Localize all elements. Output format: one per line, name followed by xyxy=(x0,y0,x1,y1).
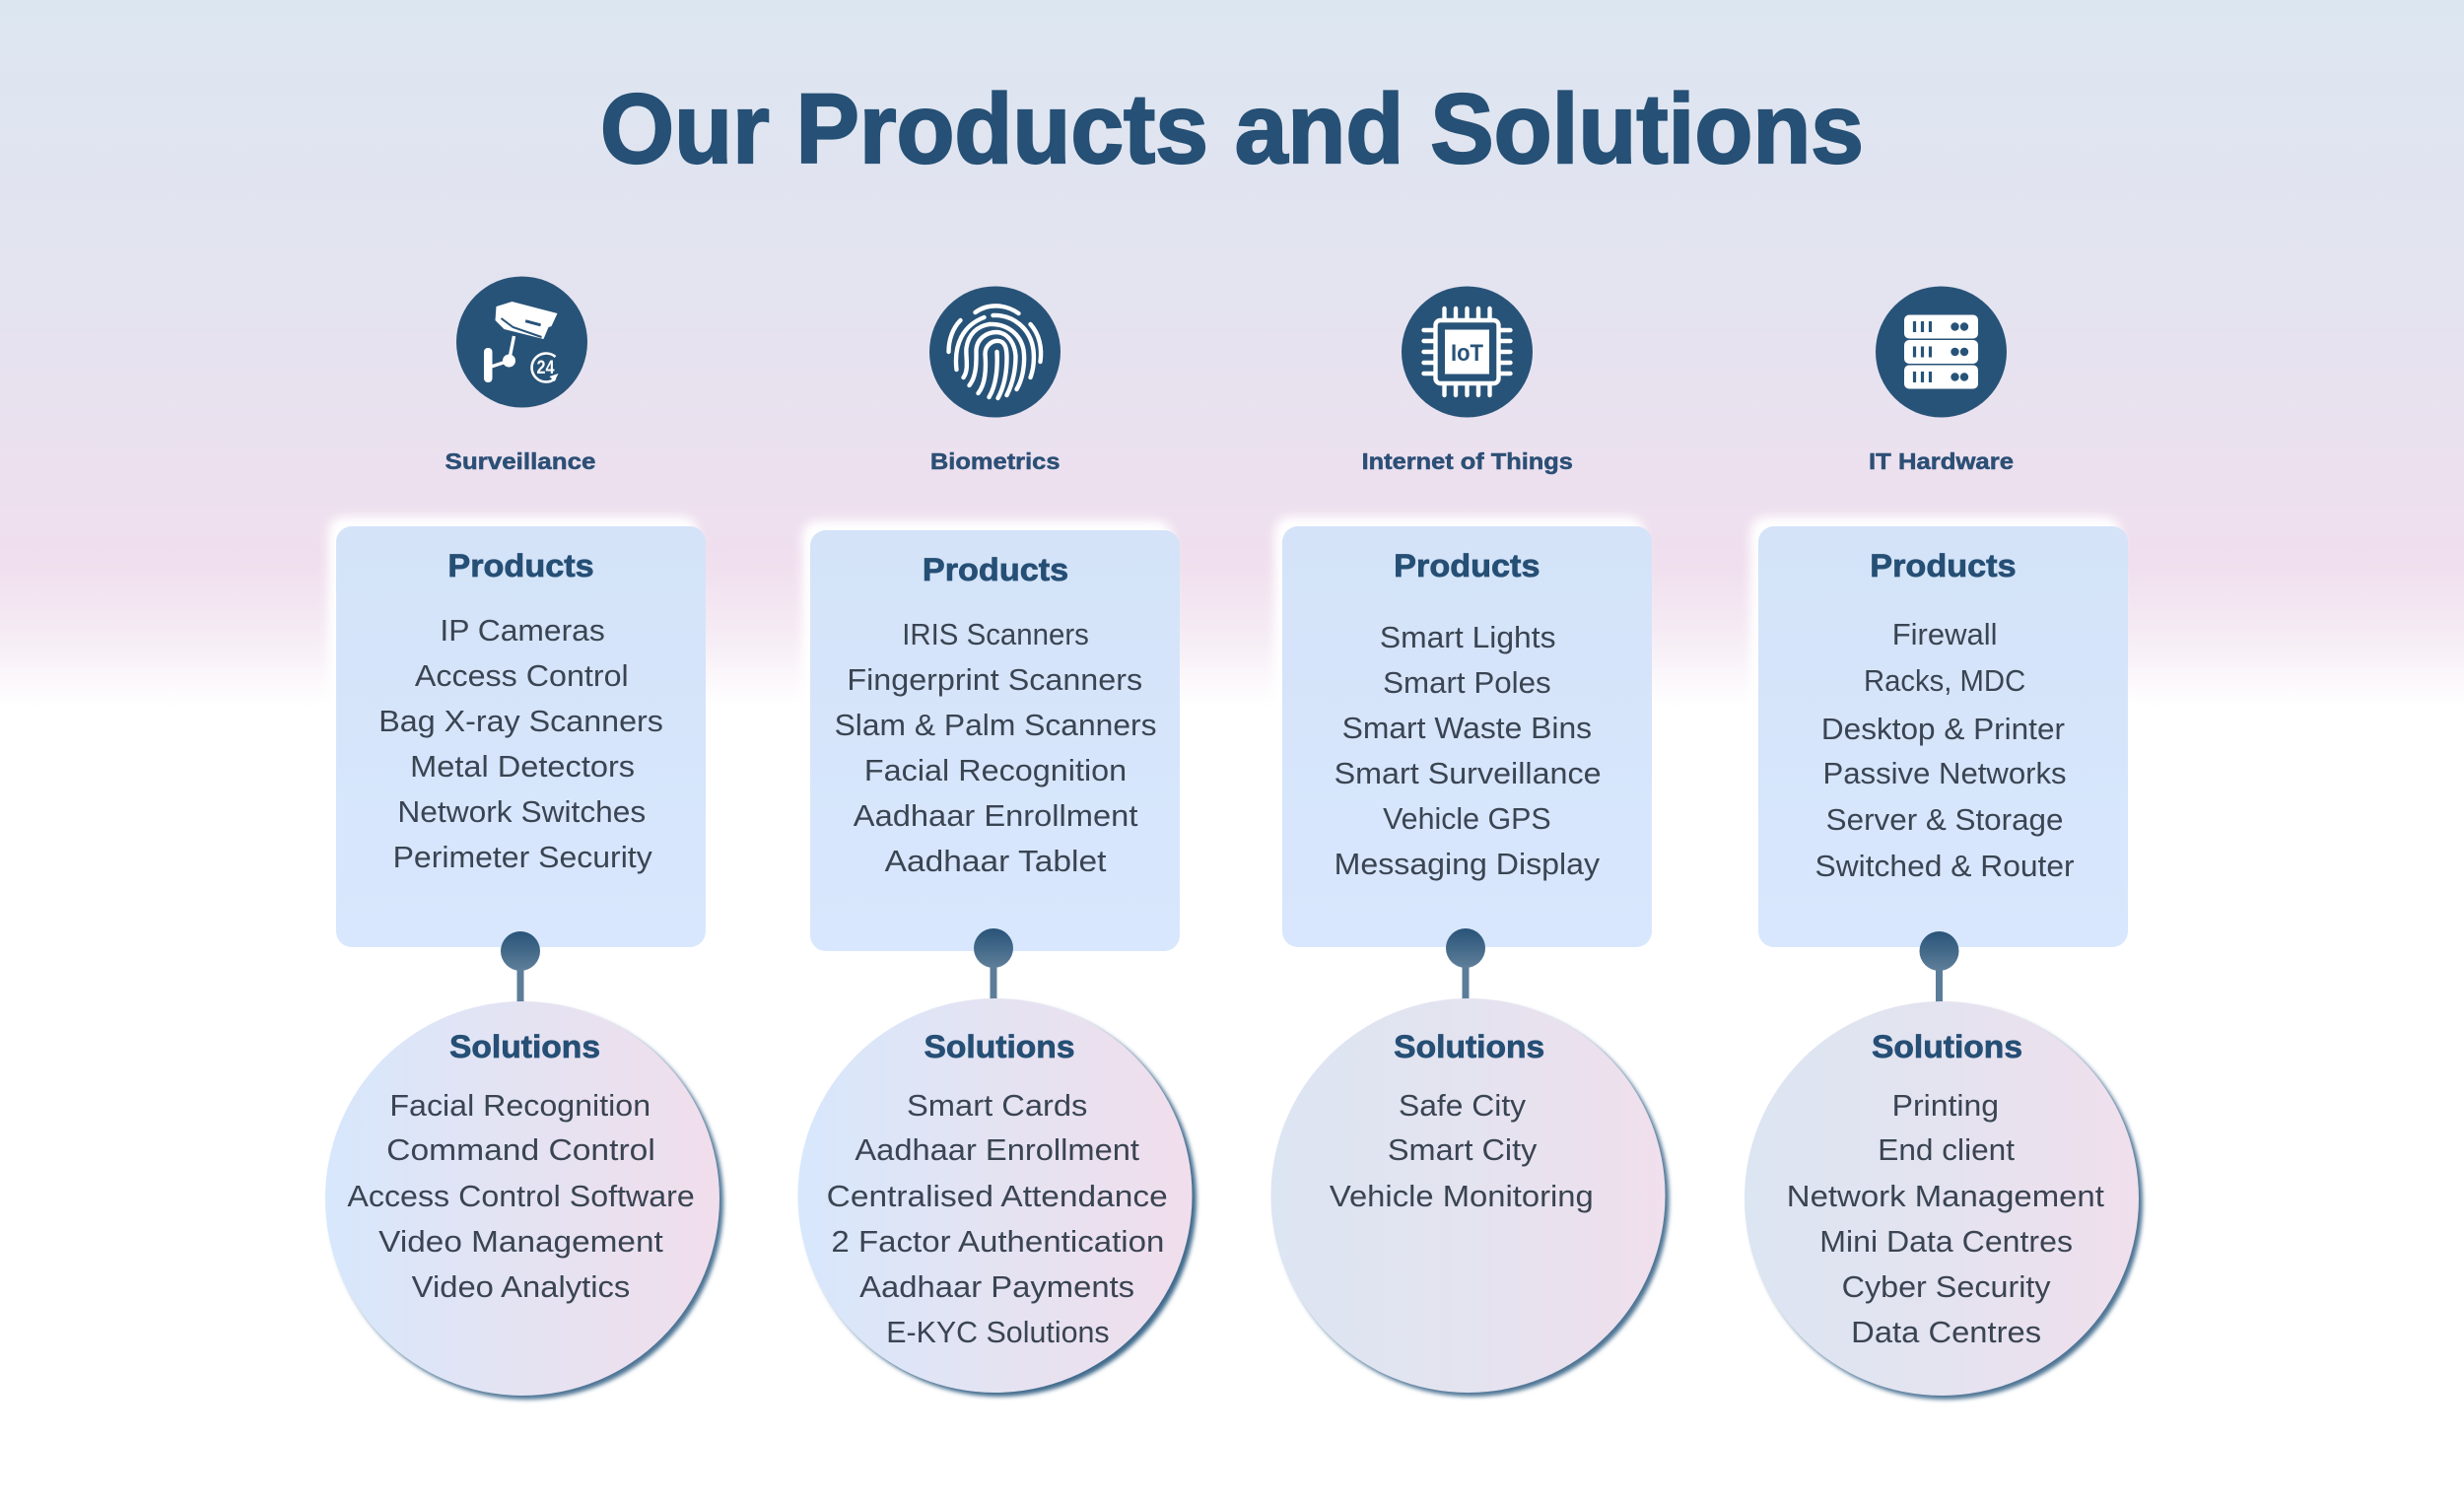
panel: surveillance solutions: Access Control Software xyxy=(347,1179,695,1213)
panel: surveillance solutions: Facial Recognition xyxy=(389,1088,650,1123)
panel: surveillance products: Bag X-ray Scanners xyxy=(378,704,663,738)
panel: internet of things products: Smart Waste Bins xyxy=(1342,711,1592,745)
panel: biometrics products: Aadhaar Enrollment xyxy=(854,798,1138,833)
panel: internet of things products: Messaging Display xyxy=(1335,847,1601,881)
panel: it hardware products: Racks, MDC xyxy=(1864,663,2025,698)
panel: biometrics solutions: Centralised Attendance xyxy=(827,1179,1168,1213)
label: internet of things: Internet of Things xyxy=(1362,448,1573,474)
panel: it hardware products: Server & Storage xyxy=(1826,802,2064,837)
panel: surveillance solutions xyxy=(325,1001,723,1400)
panel: surveillance products: Metal Detectors xyxy=(410,749,635,784)
panel: it hardware products: Products xyxy=(1870,548,2017,583)
icon: IoT chip xyxy=(1402,286,1533,418)
panel: surveillance products: Perimeter Security xyxy=(393,840,652,874)
panel: internet of things solutions: Solutions xyxy=(1394,1029,1544,1064)
connector xyxy=(1920,931,1959,1005)
panel: it hardware solutions: Solutions xyxy=(1872,1029,2022,1064)
panel: biometrics solutions: Aadhaar Payments xyxy=(859,1269,1134,1304)
title: Our Products and Solutions xyxy=(600,74,1864,184)
panel: surveillance solutions: Command Control xyxy=(386,1132,655,1167)
connector xyxy=(501,931,540,1005)
panel: internet of things solutions: Smart City xyxy=(1388,1132,1538,1167)
panel: it hardware products: Firewall xyxy=(1892,617,1997,651)
icon: IoT chip: IoT xyxy=(1451,340,1483,367)
panel: surveillance products: Access Control xyxy=(415,658,629,693)
panel: surveillance products: Products xyxy=(447,548,594,583)
icon: surveillance camera: 24 xyxy=(536,358,555,378)
panel: biometrics products: Fingerprint Scanners xyxy=(847,662,1142,697)
panel: internet of things products: Smart Poles xyxy=(1383,665,1551,700)
label: surveillance: Surveillance xyxy=(445,448,595,474)
panel: biometrics solutions: Solutions xyxy=(924,1029,1074,1064)
panel: biometrics products xyxy=(802,520,1180,951)
panel: internet of things solutions: Vehicle Monitoring xyxy=(1330,1179,1594,1213)
column: it hardware xyxy=(1745,286,2143,1400)
panel: biometrics products: Products xyxy=(923,552,1068,587)
panel: internet of things products: Products xyxy=(1394,548,1540,583)
panel: internet of things solutions xyxy=(1271,998,1670,1397)
panel: it hardware products xyxy=(1750,516,2128,947)
label: it hardware: IT Hardware xyxy=(1869,448,2014,474)
panel: it hardware products: Switched & Router xyxy=(1815,849,2075,883)
icon: fingerprint xyxy=(929,286,1061,418)
connector xyxy=(1446,928,1485,1002)
panel: surveillance products: IP Cameras xyxy=(440,613,605,648)
panel: it hardware products: Passive Networks xyxy=(1823,756,2067,790)
label: biometrics: Biometrics xyxy=(930,448,1061,474)
panel: internet of things solutions: Safe City xyxy=(1399,1088,1527,1123)
panel: it hardware solutions: Printing xyxy=(1892,1088,1999,1123)
panel: biometrics products: IRIS Scanners xyxy=(902,617,1089,651)
panel: biometrics solutions: E-KYC Solutions xyxy=(886,1315,1110,1349)
panel: it hardware solutions: Mini Data Centres xyxy=(1819,1224,2073,1259)
panel: internet of things products xyxy=(1274,516,1652,947)
column: biometrics xyxy=(798,286,1197,1397)
connector xyxy=(974,928,1013,1002)
panel: internet of things products: Smart Lights xyxy=(1380,620,1555,654)
panel: biometrics products: Aadhaar Tablet xyxy=(885,844,1107,878)
panel: internet of things products: Vehicle GPS xyxy=(1383,801,1551,836)
panel: biometrics products: Facial Recognition xyxy=(864,753,1127,787)
panel: internet of things products: Smart Surveillance xyxy=(1335,756,1602,790)
panel: biometrics solutions: Aadhaar Enrollment xyxy=(855,1132,1139,1167)
panel: biometrics solutions: 2 Factor Authentication xyxy=(831,1224,1164,1259)
panel: surveillance solutions: Video Management xyxy=(378,1224,663,1259)
panel: biometrics solutions: Smart Cards xyxy=(907,1088,1087,1123)
icon: server rack xyxy=(1876,286,2007,418)
panel: surveillance solutions: Video Analytics xyxy=(412,1269,630,1304)
panel: surveillance solutions: Solutions xyxy=(449,1029,600,1064)
panel: it hardware products: Desktop & Printer xyxy=(1821,712,2065,746)
panel: surveillance products: Network Switches xyxy=(397,794,646,829)
panel: it hardware solutions: End client xyxy=(1878,1132,2015,1167)
panel: it hardware solutions: Cyber Security xyxy=(1842,1269,2051,1304)
panel: biometrics solutions xyxy=(798,998,1197,1397)
column: internet of things xyxy=(1271,286,1670,1397)
icon: surveillance camera xyxy=(456,276,587,408)
panel: biometrics products: Slam & Palm Scanners xyxy=(835,708,1157,742)
panel: surveillance products xyxy=(328,516,706,947)
column: surveillance xyxy=(325,276,723,1400)
panel: it hardware solutions xyxy=(1745,1001,2143,1400)
panel: it hardware solutions: Data Centres xyxy=(1851,1315,2041,1349)
panel: it hardware solutions: Network Management xyxy=(1787,1179,2104,1213)
